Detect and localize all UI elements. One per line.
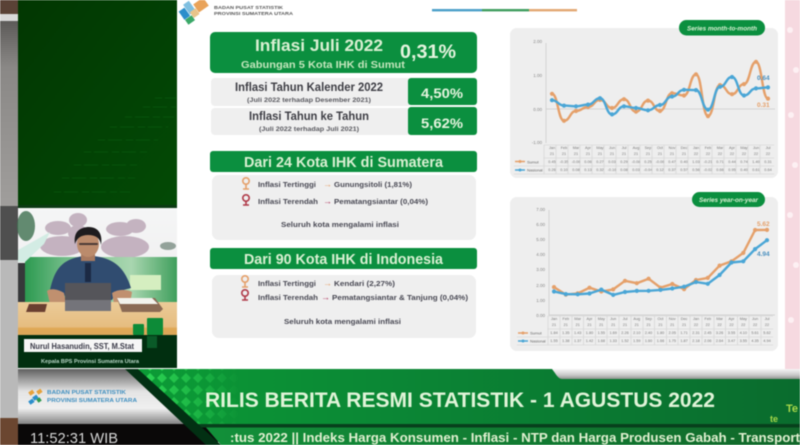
data table: 22	[741, 323, 745, 327]
data table: May	[740, 146, 748, 150]
data table: 21	[550, 152, 554, 156]
data table: 2.26	[621, 331, 629, 335]
data table: 0.13	[584, 168, 592, 172]
panel: 24 cities in Sumatra	[210, 151, 477, 240]
panel: 90 cities in Indonesia: Pematangsiantar & Tanjung (0,04%)	[332, 293, 469, 302]
green bars	[133, 324, 144, 335]
end labels	[757, 221, 770, 258]
data table: 1.37	[574, 339, 581, 343]
data table: -0.04	[644, 168, 652, 172]
data table: 3.55	[728, 331, 735, 335]
palm trees backdrop	[17, 211, 176, 258]
panel: presenter video	[17, 205, 177, 335]
data table: Jun	[609, 146, 615, 150]
data table: 0.44	[728, 160, 736, 164]
data table: Jan	[551, 317, 557, 321]
axis: 1.00	[533, 73, 542, 78]
line: Sumut	[552, 62, 768, 121]
panel: 90 cities in Indonesia: Seluruh kota mengalami inflasi	[284, 317, 401, 326]
data table: 0.08	[620, 168, 628, 172]
data table: 22	[729, 323, 734, 327]
legend: Nasional	[530, 338, 546, 344]
data table: May	[596, 146, 604, 150]
data table: 1.84	[550, 331, 558, 335]
data table: Nov	[669, 146, 675, 150]
data table: 2.10	[633, 331, 640, 335]
panel: calendar-year inflation	[211, 78, 477, 106]
end labels: 4.94	[757, 251, 770, 258]
axis: 5.00	[536, 237, 545, 242]
panel: 24 cities in Sumatra: Inflasi Tertinggi	[258, 180, 316, 189]
axis: 0.00	[536, 313, 545, 318]
data table: 0.08	[572, 168, 580, 172]
panel: 90 cities in Indonesia: Inflasi Tertinggi	[258, 279, 316, 288]
black bar	[18, 424, 218, 445]
data table: 22	[694, 152, 698, 156]
data table: Jun	[753, 146, 759, 150]
data table: 21	[670, 323, 674, 327]
axis: 3.00	[536, 267, 545, 272]
tablet	[65, 283, 111, 311]
data table	[514, 145, 774, 174]
data table: 2.45	[704, 331, 711, 335]
panel: 24 cities in Sumatra: →	[323, 196, 332, 206]
data table: -0.06	[572, 160, 580, 164]
header organisation text	[214, 5, 294, 16]
data table: Feb	[563, 317, 569, 321]
axis: 2.00	[533, 39, 542, 44]
pill label: Series year-on-year	[699, 198, 759, 204]
data table: 21	[587, 323, 592, 327]
panel: 90 cities in Indonesia: →	[323, 278, 332, 288]
data table: 0.37	[668, 168, 676, 172]
data table: 21	[562, 152, 566, 156]
icon: orange pin	[242, 276, 248, 287]
pill label: Series month-to-month	[687, 26, 757, 32]
data table: 4.35	[751, 339, 759, 343]
banner: lower third: BADAN PUSAT STATISTIK	[47, 390, 126, 396]
icon: BPS logo	[179, 0, 209, 25]
corner decoration	[770, 403, 798, 424]
data table: Mar	[573, 146, 580, 150]
data table: 22	[706, 152, 710, 156]
corner decoration: te	[770, 414, 778, 424]
data table: 1.03	[692, 160, 700, 164]
axis: 1.00	[536, 298, 545, 303]
data table: 21	[670, 152, 674, 156]
data table: Apr	[585, 146, 592, 150]
header organisation text: BADAN PUSAT STATISTIK	[214, 5, 284, 10]
data table: 1.55	[598, 331, 605, 335]
grey logo band	[18, 369, 193, 425]
data table: Sep	[645, 317, 652, 321]
axis: 7.00	[536, 207, 545, 212]
header organisation text: PROVINSI SUMATERA UTARA	[214, 11, 294, 16]
legend	[515, 160, 543, 172]
ticker text: :tus 2022 || Indeks Harga Konsumen - Inflasi - NTP dan Harga Produsen Gabah - Transport	[230, 430, 800, 445]
data table: 0.03	[632, 168, 640, 172]
panel: year-on-year inflation: Inflasi Tahun ke Tahun	[249, 111, 369, 123]
end labels: 0.31	[757, 102, 770, 109]
axis: -1.00	[532, 140, 542, 145]
end labels: 0.64	[757, 75, 770, 82]
data table: Mar	[717, 146, 724, 150]
data table: 0.26	[548, 168, 556, 172]
line: Sumut	[554, 230, 767, 295]
panel: 90 cities in Indonesia: Dari 90 Kota IHK di Indonesia	[244, 252, 444, 268]
pill label	[679, 20, 765, 36]
data table: 21	[622, 152, 626, 156]
icon: orange pin	[243, 178, 249, 189]
data table: -0.08	[632, 160, 640, 164]
data table: 0.61	[752, 168, 760, 172]
data table: 22	[765, 323, 769, 327]
axis: 4.00	[536, 252, 545, 257]
axis: 2.00	[536, 283, 545, 288]
presenter	[47, 227, 132, 304]
data table: 22	[706, 323, 710, 327]
data table: 4.10	[740, 331, 747, 335]
data table: Jul	[622, 146, 627, 150]
data table: Dec	[681, 317, 688, 321]
slide background	[177, 0, 800, 369]
data table: 0.40	[680, 160, 688, 164]
data table: 1.35	[562, 331, 569, 335]
data table: 21	[682, 152, 686, 156]
data table: 1.87	[680, 339, 688, 343]
data table: 21	[611, 323, 615, 327]
data table: -0.21	[704, 160, 712, 164]
data table: 21	[598, 152, 602, 156]
data table: 1.55	[550, 339, 558, 343]
data table: Feb	[705, 146, 711, 150]
banner: lower third	[18, 369, 800, 445]
data table: Jul	[765, 317, 770, 321]
data table: 0.45	[548, 160, 556, 164]
data table: 21	[635, 323, 639, 327]
data table: 1.40	[752, 160, 760, 164]
data table: 0.03	[608, 160, 616, 164]
legend: Nasional	[527, 168, 543, 172]
panel: headline inflation: Inflasi Juli 2022	[255, 36, 383, 55]
panel: 24 cities in Sumatra: Seluruh kota mengalami inflasi	[281, 220, 399, 229]
pill label	[692, 192, 765, 207]
axis: 0.00	[533, 107, 542, 112]
data table: 21	[658, 152, 662, 156]
data table: -0.06	[656, 160, 664, 164]
panel: headline inflation: 0,31%	[400, 42, 456, 63]
divider above ticker	[195, 424, 800, 428]
data table: 0.66	[716, 168, 724, 172]
legend: Sumut	[530, 330, 542, 336]
data table: 1.66	[657, 339, 664, 343]
phone	[26, 304, 47, 312]
axis	[536, 207, 775, 318]
data table: May	[598, 317, 605, 321]
data table: 0.56	[692, 168, 700, 172]
data table: Apr	[587, 317, 593, 321]
data table: 5.61	[751, 331, 759, 335]
data table: -0.35	[560, 160, 568, 164]
data table: 0.12	[656, 168, 664, 172]
green wall	[25, 257, 177, 303]
data table: 0.32	[596, 168, 604, 172]
corner decoration: Te	[786, 403, 798, 415]
green title band	[138, 369, 800, 425]
data table: 0.10	[560, 168, 568, 172]
data table: Jun	[752, 317, 758, 321]
data table: -0.02	[704, 168, 712, 172]
data table: 5.62	[763, 331, 771, 335]
data table: 21	[564, 323, 568, 327]
data table: Aug	[633, 146, 639, 150]
data table: Sep	[645, 146, 651, 150]
banner: lower third: PROVINSI SUMATERA UTARA	[47, 398, 137, 404]
panel: headline inflation	[210, 32, 477, 73]
panel: calendar-year inflation: Inflasi Tahun Kalender 2022	[235, 82, 383, 94]
name caption: Nurul Hasanudin, SST, M.Stat	[30, 342, 134, 351]
data table: 22	[766, 152, 770, 156]
panel: year-on-year inflation: 5,62%	[421, 115, 464, 131]
data table: 3.55	[740, 339, 747, 343]
data table: 2.18	[692, 339, 700, 343]
papers	[117, 298, 163, 312]
banner title: RILIS BERITA RESMI STATISTIK - 1 AGUSTUS 2022	[205, 389, 715, 412]
data table: 1.42	[586, 339, 593, 343]
data table: 1.43	[574, 331, 581, 335]
data table: 4.94	[763, 339, 771, 343]
chart: series month-to-month	[510, 20, 778, 178]
data table: 1.75	[669, 339, 676, 343]
data table: 0.29	[620, 160, 628, 164]
data table: 21	[610, 152, 614, 156]
panel: calendar-year inflation: 4,50%	[421, 85, 464, 101]
data table: 2.64	[716, 339, 723, 343]
data table: 21	[576, 323, 580, 327]
desk	[18, 302, 177, 335]
data table: 21	[658, 323, 663, 327]
panel: 24 cities in Sumatra: Pematangsiantar (0,04%)	[334, 197, 429, 206]
data table: Jun	[610, 317, 616, 321]
legend	[518, 330, 546, 344]
panel: 90 cities in Indonesia: →	[321, 292, 330, 302]
data table: Mar	[716, 317, 724, 321]
data table: Dec	[681, 146, 687, 150]
data table: 1.60	[645, 339, 652, 343]
panel: 90 cities in Indonesia: Kendari (2,27%)	[334, 279, 396, 288]
data table: Nov	[669, 317, 676, 321]
data table: 1.80	[657, 331, 664, 335]
end labels	[757, 75, 770, 109]
data table: 0.95	[728, 168, 736, 172]
data table: 1.80	[586, 331, 593, 335]
name caption	[18, 335, 177, 368]
axis	[532, 39, 775, 145]
data table: Oct	[657, 146, 664, 150]
data table: 21	[552, 323, 556, 327]
data table: 1.38	[562, 339, 569, 343]
line: Nasional	[552, 77, 768, 114]
line: Nasional	[554, 240, 767, 295]
panel: 24 cities in Sumatra: Inflasi Terendah	[258, 197, 318, 206]
data table: 2.40	[645, 331, 652, 335]
data table: 0.31	[764, 160, 772, 164]
data table: Apr	[729, 317, 735, 321]
data table: 0.57	[680, 168, 688, 172]
axis: 6.00	[536, 222, 545, 227]
panel: 90 cities in Indonesia: Inflasi Terendah	[258, 293, 318, 302]
data table: 0.40	[740, 168, 748, 172]
panel: year-on-year inflation: (Juli 2022 terhadap Juli 2021)	[259, 127, 359, 133]
data table: Feb	[561, 146, 567, 150]
data table: 21	[646, 152, 650, 156]
data table: Jan	[693, 146, 699, 150]
data table: 22	[742, 152, 746, 156]
data table: Mar	[574, 317, 582, 321]
data table: Jan	[693, 317, 699, 321]
data table: Oct	[658, 317, 664, 321]
data table: 1.52	[621, 339, 629, 343]
data table: 1.68	[598, 339, 605, 343]
icon: red pin	[243, 195, 249, 205]
data table: 21	[634, 152, 638, 156]
data table: 1.69	[610, 331, 617, 335]
chart: series year-on-year	[510, 192, 778, 351]
panel: headline inflation: Gabungan 5 Kota IHK di Sumut	[241, 59, 406, 71]
panel: 90 cities in Indonesia	[210, 248, 477, 338]
data table: 22	[717, 323, 722, 327]
light wedge	[552, 369, 800, 379]
data table: May	[740, 317, 747, 321]
data table: Feb	[705, 317, 711, 321]
data table: Jul	[766, 146, 771, 150]
data table: 22	[718, 152, 722, 156]
data table: 21	[623, 323, 627, 327]
end labels: 5.62	[757, 221, 770, 228]
panel: year-on-year inflation	[211, 107, 477, 135]
data table: Jul	[623, 317, 628, 321]
data table: 0.64	[764, 168, 772, 172]
data table: 22	[730, 152, 734, 156]
data table: 3.26	[716, 331, 723, 335]
background: left video strip	[0, 0, 18, 445]
panel: 24 cities in Sumatra: Dari 24 Kota IHK di Sumatera	[244, 155, 444, 171]
data table: 21	[646, 323, 651, 327]
data table: Aug	[633, 317, 640, 321]
panel: calendar-year inflation: (Juli 2022 terhadap Desember 2021)	[247, 98, 371, 104]
data table: 2.05	[669, 331, 676, 335]
data table: Apr	[729, 146, 736, 150]
ticker band	[206, 428, 800, 445]
header colour line	[432, 9, 577, 11]
dark diagonal	[125, 369, 221, 445]
data table: 1.33	[610, 339, 617, 343]
data table: 21	[586, 152, 590, 156]
data table: 21	[682, 323, 686, 327]
panel: 24 cities in Sumatra: →	[323, 179, 332, 189]
data table: 21	[599, 323, 603, 327]
data table: 22	[753, 323, 757, 327]
data table: 2.31	[692, 331, 700, 335]
data table: 0.06	[584, 160, 592, 164]
data table: 1.71	[680, 331, 688, 335]
data table: 0.27	[596, 160, 604, 164]
data table: 21	[574, 152, 578, 156]
icon: red pin	[242, 290, 248, 300]
data table: 0.71	[716, 160, 724, 164]
data table: 0.25	[644, 160, 652, 164]
panel: dark green backdrop	[18, 0, 177, 205]
data table: -0.16	[608, 168, 616, 172]
data table: Jan	[549, 146, 555, 150]
data table: 22	[694, 323, 698, 327]
legend: Sumut	[527, 160, 539, 164]
BPS logo small	[28, 389, 43, 405]
data table	[517, 316, 773, 345]
data table: 3.47	[728, 339, 735, 343]
name caption: Kepala BPS Provinsi Sumatera Utara	[41, 359, 140, 365]
data table: 1.59	[633, 339, 640, 343]
data table: 0.74	[740, 160, 748, 164]
data table: 22	[754, 152, 758, 156]
data table: 0.47	[668, 160, 676, 164]
data table: 2.06	[704, 339, 711, 343]
panel: 24 cities in Sumatra: Gunungsitoli (1,81%)	[334, 180, 413, 189]
